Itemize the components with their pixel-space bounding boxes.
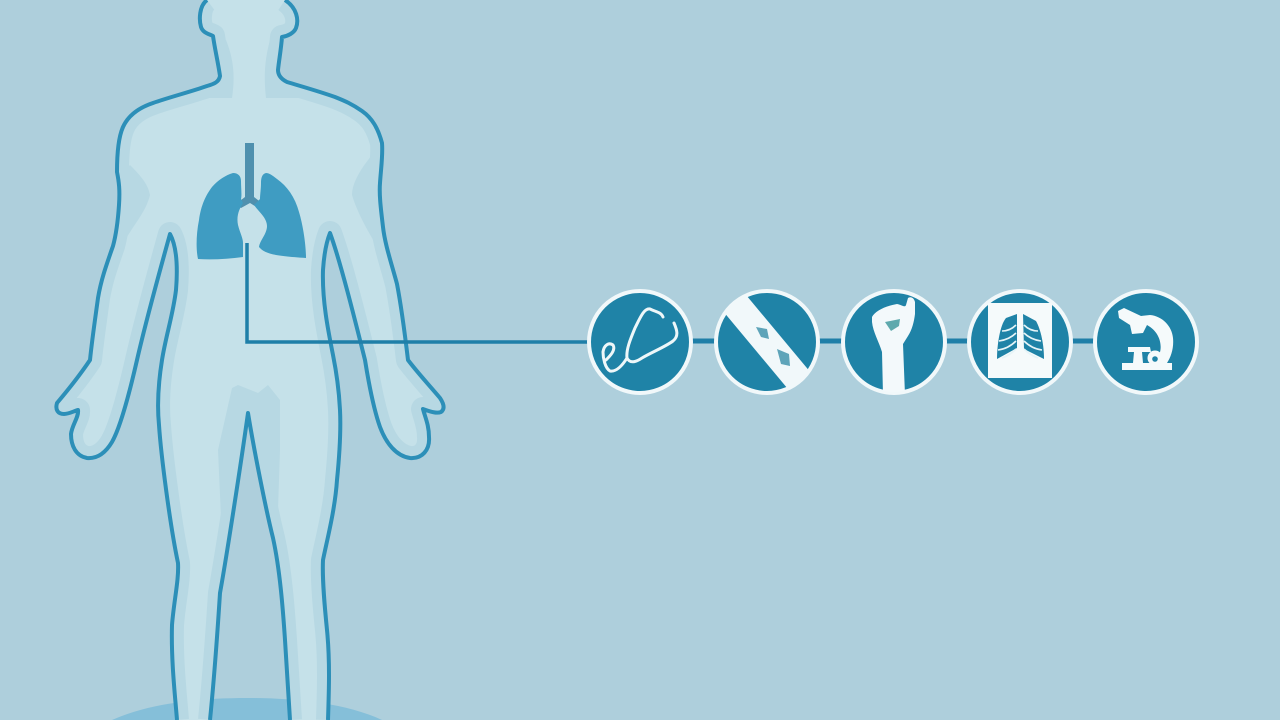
icon: chest x-ray	[969, 291, 1071, 393]
trachea	[236, 143, 263, 208]
connector segments between icons	[692, 338, 1096, 344]
icon: microscope	[1095, 291, 1197, 393]
ground shadow ellipse	[112, 698, 382, 720]
human body figure	[56, 0, 444, 720]
icon: stethoscope	[589, 291, 691, 393]
icon: bandage	[716, 291, 818, 393]
icon: raised hand	[843, 291, 945, 395]
connector line from lungs to icons	[247, 243, 590, 342]
right lung	[254, 173, 306, 258]
left lung	[197, 173, 243, 259]
lungs	[197, 143, 306, 259]
